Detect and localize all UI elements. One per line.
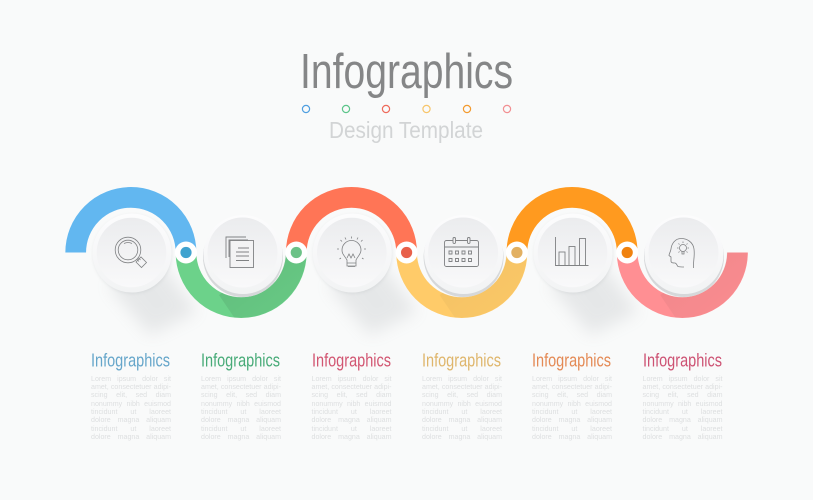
body: step 3: dolore magna aliquam: [312, 433, 392, 441]
body: step 4: [422, 374, 502, 441]
body: step 5: scing elit, sed diam: [532, 391, 612, 399]
text block: step 3: [312, 350, 392, 441]
icon: magnifier: [115, 237, 146, 268]
junction: blue: [175, 242, 197, 264]
body: step 5: tincidunt ut laoreet: [532, 408, 612, 416]
step 3 disc with light bulb icon: [313, 214, 392, 294]
body: step 2: Lorem ipsum dolor sit: [201, 374, 281, 382]
step 5 disc with bar chart icon: [534, 214, 613, 294]
junction: yellow: [506, 242, 528, 264]
body: step 1: tincidunt ut laoreet: [91, 425, 171, 433]
icon: documents: [226, 237, 254, 268]
junction: green: [285, 242, 307, 264]
ribbon: orange arc: [517, 197, 627, 252]
ribbon: green arc: [186, 252, 296, 308]
body: step 3: Lorem ipsum dolor sit: [312, 374, 392, 382]
body: step 3: amet, consectetuer adipi-: [312, 383, 392, 391]
body: step 1: tincidunt ut laoreet: [91, 408, 171, 416]
icon: calendar: [444, 238, 478, 266]
soft shadows under upper circles: [108, 262, 638, 335]
text block: step 1: [91, 350, 171, 441]
body: step 4: tincidunt ut laoreet: [422, 408, 502, 416]
body: step 5: amet, consectetuer adipi-: [532, 383, 612, 391]
body: step 5: dolore magna aliquam: [532, 433, 612, 441]
title: Infographics: [300, 45, 513, 99]
body: step 4: amet, consectetuer adipi-: [422, 383, 502, 391]
body: step 4: Lorem ipsum dolor sit: [422, 374, 502, 382]
step 2 disc with documents icon: [203, 215, 283, 297]
text block: step 2: [201, 350, 281, 441]
body: step 2: amet, consectetuer adipi-: [201, 383, 281, 391]
icon: bar chart: [556, 237, 588, 266]
body: step 4: nonummy nibh euismod: [422, 400, 502, 408]
body: step 6: nonummy nibh euismod: [642, 400, 722, 408]
body: step 2: dolore magna aliquam: [201, 416, 281, 424]
body: step 5: [532, 374, 612, 441]
text block: step 6: [642, 350, 722, 441]
body: step 1: dolore magna aliquam: [91, 433, 171, 441]
ribbon: pink arc: [627, 252, 738, 308]
junction: orange: [616, 242, 638, 264]
body: step 1: Lorem ipsum dolor sit: [91, 374, 171, 382]
body: step 2: tincidunt ut laoreet: [201, 425, 281, 433]
ribbon long shadows: [219, 252, 747, 318]
body: step 5: nonummy nibh euismod: [532, 400, 612, 408]
body: step 6: scing elit, sed diam: [642, 391, 722, 399]
body: step 6: tincidunt ut laoreet: [642, 408, 722, 416]
body: step 5: dolore magna aliquam: [532, 416, 612, 424]
body: step 3: nonummy nibh euismod: [312, 400, 392, 408]
body: step 6: tincidunt ut laoreet: [642, 425, 722, 433]
body: step 1: dolore magna aliquam: [91, 416, 171, 424]
body: step 6: dolore magna aliquam: [642, 433, 722, 441]
heading: step 3: Infographics: [312, 350, 390, 370]
heading: step 6: Infographics: [642, 350, 722, 370]
text block: step 5: [532, 350, 612, 441]
heading: step 2: Infographics: [201, 350, 280, 370]
body: step 4: tincidunt ut laoreet: [422, 425, 502, 433]
ribbon: yellow arc: [407, 252, 517, 308]
body: step 6: amet, consectetuer adipi-: [642, 383, 722, 391]
body: step 4: dolore magna aliquam: [422, 433, 502, 441]
body: step 2: tincidunt ut laoreet: [201, 408, 281, 416]
ribbon: blue arc: [76, 197, 186, 252]
icon: light bulb: [337, 236, 366, 266]
text block: step 4: [422, 350, 502, 441]
body: step 6: Lorem ipsum dolor sit: [642, 374, 722, 382]
icon: head with bulb: [669, 238, 694, 268]
body: step 1: [91, 374, 171, 441]
body: step 3: scing elit, sed diam: [312, 391, 392, 399]
ribbon: red arc: [296, 197, 407, 252]
body: step 1: scing elit, sed diam: [91, 391, 171, 399]
heading: step 1: Infographics: [91, 350, 170, 370]
title dots: [302, 105, 511, 113]
body: step 3: [312, 374, 392, 441]
body: step 3: tincidunt ut laoreet: [312, 408, 392, 416]
body: step 2: [201, 374, 281, 441]
body: step 2: dolore magna aliquam: [201, 433, 281, 441]
body: step 1: nonummy nibh euismod: [91, 400, 171, 408]
body: step 1: amet, consectetuer adipi-: [91, 383, 171, 391]
step 6 disc with head idea icon: [644, 215, 724, 297]
body: step 5: tincidunt ut laoreet: [532, 425, 612, 433]
body: step 4: dolore magna aliquam: [422, 416, 502, 424]
body: step 3: dolore magna aliquam: [312, 416, 392, 424]
step 1 disc with magnifier icon: [92, 214, 172, 294]
subtitle: Design Template: [329, 117, 483, 143]
step 4 disc with calendar icon: [424, 215, 504, 297]
body: step 5: Lorem ipsum dolor sit: [532, 374, 612, 382]
heading: step 5: Infographics: [532, 350, 611, 370]
heading: step 4: Infographics: [422, 350, 501, 370]
body: step 6: [642, 374, 722, 441]
body: step 2: scing elit, sed diam: [201, 391, 281, 399]
body: step 2: nonummy nibh euismod: [201, 400, 281, 408]
body: step 3: tincidunt ut laoreet: [312, 425, 392, 433]
body: step 6: dolore magna aliquam: [642, 416, 722, 424]
body: step 4: scing elit, sed diam: [422, 391, 502, 399]
junction: red: [396, 242, 418, 264]
